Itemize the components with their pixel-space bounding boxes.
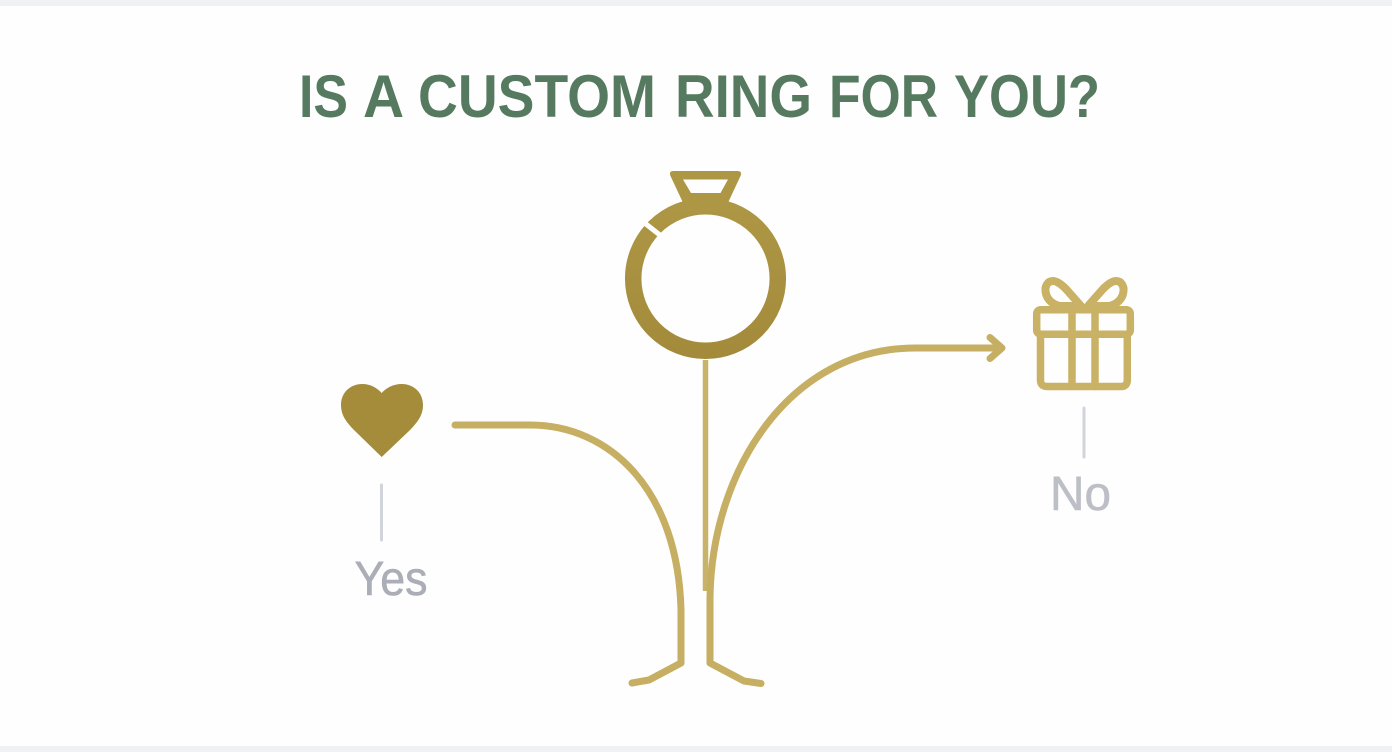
title: IS <box>299 63 348 130</box>
yes label: Yes <box>354 553 428 606</box>
title: FOR <box>829 63 938 130</box>
arrow: centre stem <box>703 360 708 591</box>
icon: heart <box>341 384 423 457</box>
icon: gift <box>1037 281 1130 386</box>
no label: No <box>1050 468 1111 521</box>
arrow: no path <box>710 348 1001 684</box>
title: RING <box>675 63 812 130</box>
arrowhead: no path <box>990 338 1002 358</box>
no connector <box>1082 408 1086 457</box>
title: A <box>363 63 403 130</box>
icon: ring <box>633 171 778 351</box>
title: YOU? <box>954 63 1100 130</box>
yes connector <box>380 485 383 540</box>
arrow: yes path <box>455 425 681 683</box>
title: CUSTOM <box>418 63 656 130</box>
